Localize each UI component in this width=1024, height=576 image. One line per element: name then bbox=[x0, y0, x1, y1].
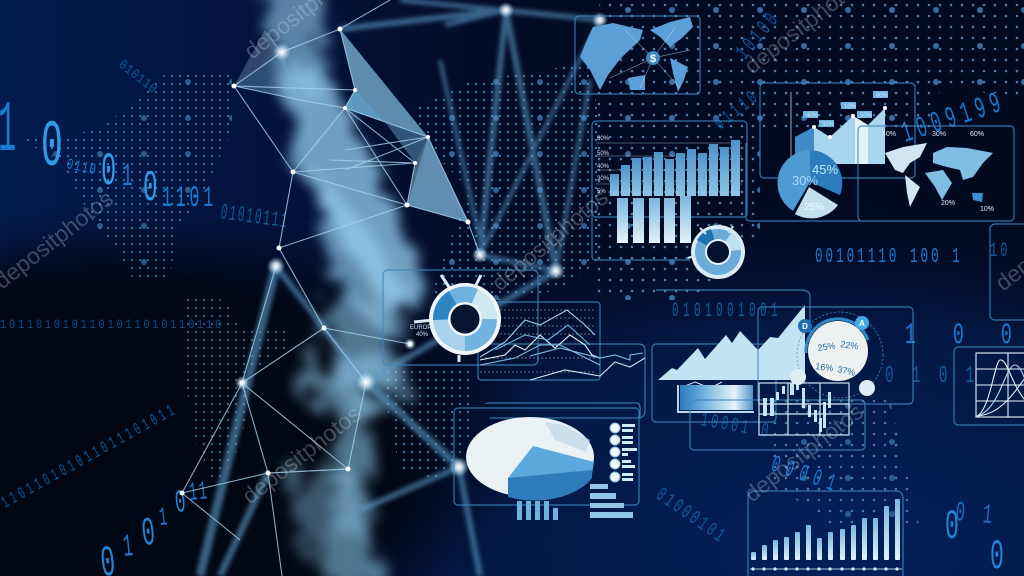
binary digit streams: 0 bbox=[140, 510, 157, 557]
area trend chart: 50% bbox=[860, 113, 873, 119]
binary digit streams: 00001 bbox=[768, 451, 845, 500]
binary digit streams: 010110 bbox=[115, 56, 161, 97]
panel: candlestick and metric gauge bbox=[690, 307, 913, 450]
donut chart: large: 40% bbox=[416, 332, 429, 338]
binary digit streams: 1011010101101011010110110 bbox=[0, 317, 224, 332]
watermark: depositphotos bbox=[487, 184, 613, 296]
pie chart: 45% bbox=[812, 162, 838, 177]
curve chart bbox=[976, 353, 1024, 417]
binary digit streams: 0 bbox=[101, 147, 116, 199]
binary digit streams: 110110101011011101011 bbox=[0, 401, 182, 513]
area shape bbox=[658, 305, 805, 380]
bars bbox=[751, 499, 900, 560]
binary digit streams: 0 bbox=[173, 485, 188, 522]
binary digit streams: 1009199 bbox=[898, 86, 1011, 151]
donut chart: large bbox=[410, 275, 501, 362]
panel: world map with dollar hub bbox=[575, 16, 700, 94]
gauge bbox=[790, 312, 883, 398]
binary digit streams: 0110 bbox=[65, 156, 99, 179]
binary digit streams: 10001 0 bbox=[699, 408, 773, 443]
defocused glowing strands bbox=[200, 0, 600, 576]
map percentage labels: 60% bbox=[970, 131, 984, 138]
panel: stacked bar chart bbox=[592, 196, 691, 260]
binary digit streams: 0101001001 bbox=[672, 300, 782, 322]
area trend chart: 10% bbox=[844, 104, 857, 110]
gridlines and axis labels: 60% bbox=[597, 136, 610, 142]
translucent mesh facets bbox=[234, 29, 468, 222]
binary digit streams: 0 bbox=[945, 505, 959, 552]
network mesh bbox=[180, 0, 608, 576]
donut chart: small bbox=[688, 225, 745, 279]
binary digit streams: 0 bbox=[41, 110, 63, 185]
map percentage labels: 10% bbox=[980, 206, 994, 213]
watermark: depositphotos bbox=[237, 400, 366, 509]
panel: 3D globe pie chart bbox=[454, 403, 640, 520]
binary digit streams: 01010111 bbox=[219, 202, 290, 235]
panel: bar chart bbox=[592, 121, 747, 217]
candlestick chart bbox=[759, 380, 849, 435]
binary digit streams: 0 1 0 1 bbox=[885, 363, 979, 389]
binary digit streams: 00101110 100 1 bbox=[815, 246, 963, 269]
pie chart bbox=[777, 150, 842, 218]
binary digit streams: 01000101 bbox=[652, 483, 732, 549]
donut chart: large: EUROPE bbox=[410, 325, 435, 331]
gridlines and axis labels bbox=[596, 136, 742, 195]
gauge: 25% bbox=[817, 341, 836, 353]
binary digit streams: 0 bbox=[143, 163, 158, 214]
mesh connection lines bbox=[182, 0, 480, 576]
gridlines and axis labels: 50% bbox=[597, 151, 610, 157]
bars bbox=[610, 140, 740, 196]
gridlines and axis labels: 30% bbox=[597, 176, 610, 182]
gauge: 37% bbox=[837, 364, 856, 378]
timeline axis bbox=[750, 567, 902, 571]
world map bbox=[580, 17, 693, 92]
panel: trend and pie chart bbox=[746, 83, 915, 221]
binary digit streams: 0 1 bbox=[954, 497, 998, 532]
binary digit streams: 1 0 0 bbox=[905, 319, 1024, 353]
striped bar bbox=[677, 382, 754, 413]
3D pie bbox=[466, 417, 594, 501]
panel: distribution curves bbox=[954, 347, 1024, 425]
area trend chart: 40% bbox=[806, 113, 819, 119]
binary digit streams: 1 bbox=[122, 159, 133, 195]
stacked bars bbox=[617, 196, 691, 243]
gauge: D bbox=[802, 322, 808, 331]
binary digit streams: 01110 bbox=[710, 85, 765, 135]
line chart bbox=[480, 310, 645, 380]
map percentage labels: 40% bbox=[882, 131, 896, 138]
binary digit streams: 10100 bbox=[732, 6, 786, 65]
gauge: A bbox=[859, 319, 865, 328]
area trend chart bbox=[791, 91, 889, 165]
pie legend bbox=[610, 423, 637, 482]
panel: donut chart and line chart bbox=[383, 270, 645, 418]
gauge: 16% bbox=[815, 361, 834, 373]
vertical bars bbox=[517, 501, 558, 520]
pie chart: 30% bbox=[792, 173, 818, 188]
icon: dollar hub: $ bbox=[650, 53, 656, 65]
gridlines and axis labels: 40% bbox=[597, 164, 610, 170]
panel: world map with percentages bbox=[858, 126, 1014, 221]
watermark: depositphotos bbox=[739, 398, 868, 507]
pie chart: 25% bbox=[804, 202, 824, 213]
gauge: 22% bbox=[840, 339, 859, 351]
map percentage labels: 20% bbox=[941, 200, 955, 207]
world map bbox=[885, 143, 993, 207]
map percentage labels bbox=[882, 131, 994, 213]
panel: partial right frame bbox=[990, 224, 1024, 320]
binary digit streams: 1 bbox=[158, 504, 169, 534]
gridlines and axis labels: 5% bbox=[597, 189, 606, 195]
mesh nodes bbox=[180, 26, 470, 496]
binary digit streams: 10 bbox=[990, 239, 1010, 262]
binary digit streams: 1 bbox=[121, 529, 135, 566]
map percentage labels: 30% bbox=[932, 131, 946, 138]
panel: growth bar chart bbox=[748, 491, 903, 576]
binary digit streams: 11 bbox=[188, 478, 210, 509]
binary digit streams: 1101 bbox=[162, 182, 217, 216]
horizontal bars bbox=[590, 484, 633, 518]
panel: area chart bbox=[652, 290, 810, 422]
area trend chart: 80% bbox=[876, 93, 889, 99]
glowing nodes bbox=[235, 2, 608, 477]
area trend chart: 30% bbox=[822, 122, 835, 128]
